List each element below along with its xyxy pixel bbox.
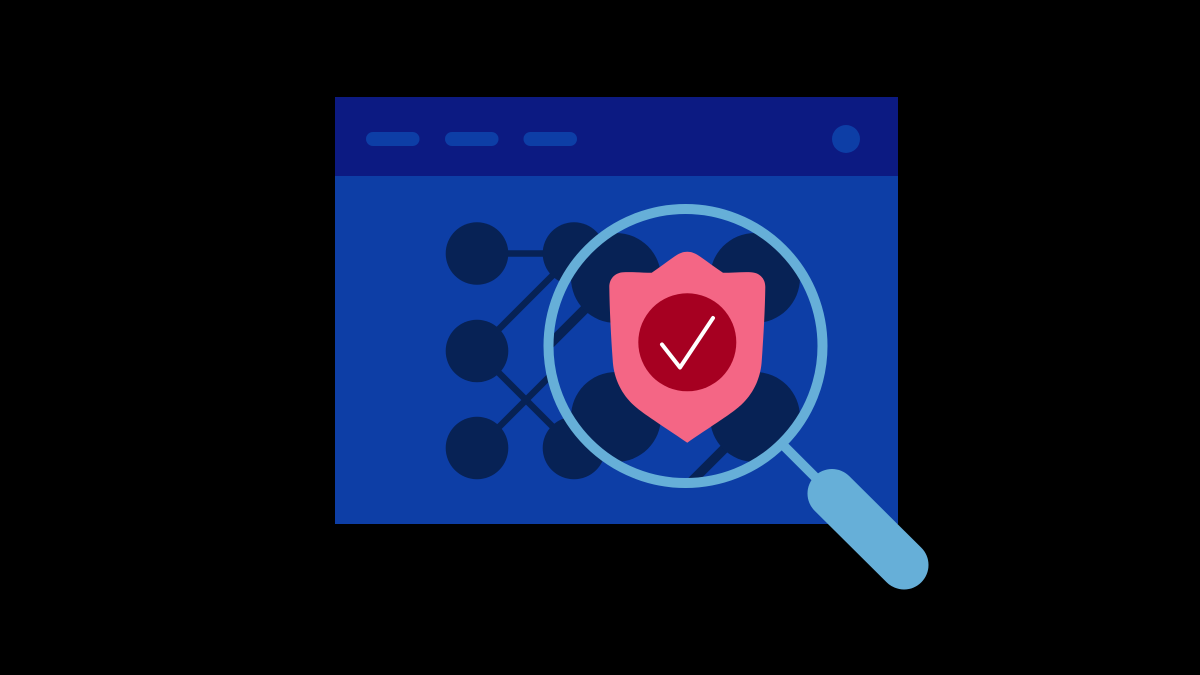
magnifying glass bbox=[548, 209, 904, 565]
network connecting lines bbox=[477, 254, 580, 449]
magnified network seen through the lens bbox=[554, 233, 800, 478]
magnified connecting lines bbox=[554, 306, 728, 478]
shield bbox=[609, 252, 765, 443]
magnified network nodes bbox=[571, 233, 800, 462]
network nodes bbox=[446, 222, 605, 479]
window body bbox=[335, 97, 898, 524]
magnifier stem bbox=[782, 444, 832, 494]
magnifier handle bbox=[832, 494, 904, 565]
header menu pill 1 bbox=[366, 132, 420, 146]
check mark bbox=[662, 318, 713, 368]
window header bar bbox=[335, 97, 898, 176]
magnifier ring bbox=[548, 209, 822, 483]
header menu pill 2 bbox=[445, 132, 498, 146]
security shield badge bbox=[609, 252, 765, 443]
network diagram bbox=[446, 222, 605, 479]
header round button bbox=[832, 125, 860, 153]
red circle bbox=[638, 293, 736, 391]
browser window bbox=[335, 97, 898, 524]
header menu pill 3 bbox=[524, 132, 577, 146]
lens interior bbox=[555, 280, 582, 374]
illustration: security inspection of a network bbox=[335, 97, 928, 590]
